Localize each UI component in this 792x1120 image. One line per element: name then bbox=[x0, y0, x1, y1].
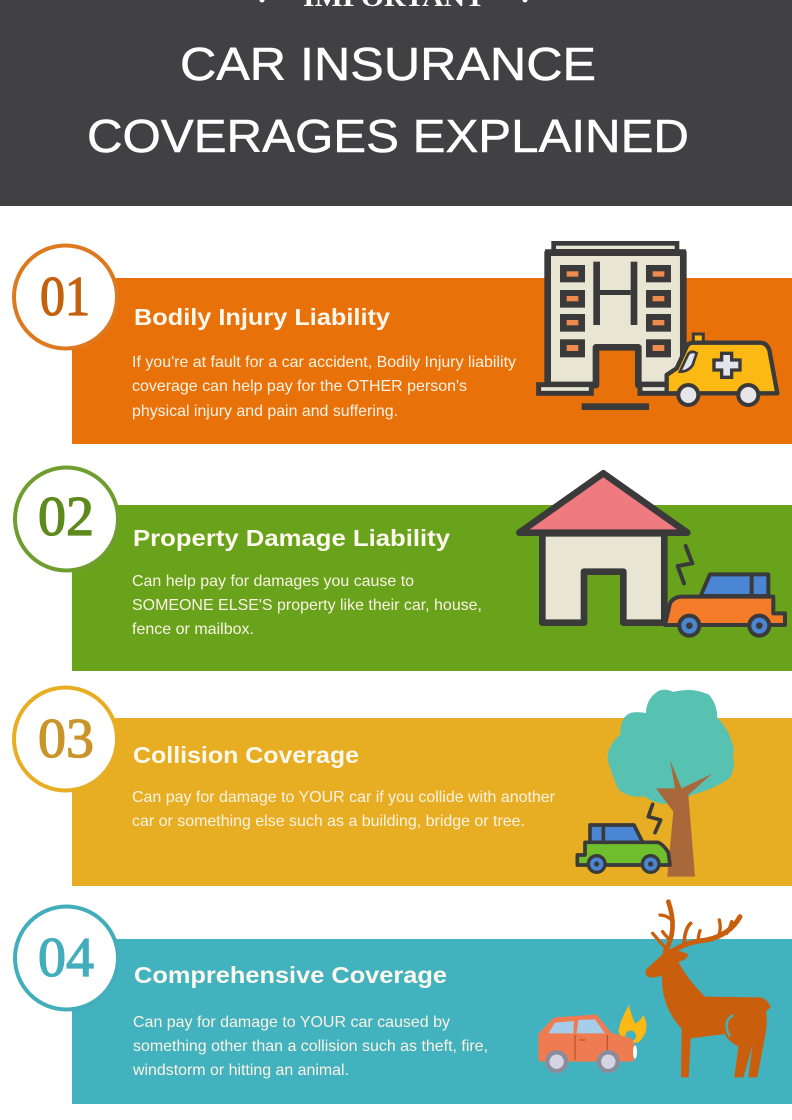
description: windstorm or hitting an animal. bbox=[132, 1062, 349, 1079]
description: car or something else such as a building, bridge or tree. bbox=[132, 813, 525, 830]
number badge 04 bbox=[15, 906, 118, 1010]
number badge 03 bbox=[14, 688, 117, 790]
description: physical injury and pain and suffering. bbox=[132, 403, 398, 420]
icon: tree and car bbox=[577, 691, 733, 877]
description bbox=[132, 789, 556, 830]
icon: deer and burning car bbox=[541, 902, 771, 1077]
description: If you're at fault for a car accident, Bodily Injury liability bbox=[132, 354, 516, 371]
panel: bodily injury liability bbox=[14, 243, 792, 444]
heading: Bodily Injury Liability bbox=[134, 304, 390, 330]
number badge 04: 04 bbox=[38, 927, 94, 989]
icon: hospital and ambulance bbox=[539, 243, 777, 410]
description bbox=[132, 1014, 488, 1079]
description: Can help pay for damages you cause to bbox=[132, 573, 414, 590]
description: fence or mailbox. bbox=[132, 621, 254, 638]
heading: Collision Coverage bbox=[133, 742, 359, 768]
panel: comprehensive coverage bbox=[15, 902, 792, 1104]
panel: property damage liability bbox=[15, 468, 792, 671]
heading: Comprehensive Coverage bbox=[134, 962, 447, 988]
description: coverage can help pay for the OTHER person's bbox=[132, 378, 467, 395]
title bbox=[87, 38, 689, 162]
description: Can pay for damage to YOUR car if you collide with another bbox=[132, 789, 556, 806]
panel: collision coverage bbox=[14, 688, 792, 886]
number badge 02: 02 bbox=[38, 486, 94, 548]
cropped kicker bbox=[260, 0, 528, 12]
number badge 03: 03 bbox=[38, 708, 94, 770]
description bbox=[132, 573, 482, 638]
description: Can pay for damage to YOUR car caused by bbox=[133, 1014, 450, 1031]
header banner bbox=[0, 0, 792, 206]
title: COVERAGES EXPLAINED bbox=[87, 110, 689, 162]
heading: Property Damage Liability bbox=[133, 525, 450, 551]
number badge 01: 01 bbox=[40, 266, 90, 328]
number badge 02 bbox=[15, 468, 118, 570]
description bbox=[132, 354, 516, 420]
description: something other than a collision such as theft, fire, bbox=[133, 1038, 488, 1055]
number badge 01 bbox=[14, 246, 117, 348]
title: CAR INSURANCE bbox=[180, 38, 596, 90]
description: SOMEONE ELSE'S property like their car, house, bbox=[132, 597, 482, 614]
icon: house and car bbox=[519, 473, 785, 636]
